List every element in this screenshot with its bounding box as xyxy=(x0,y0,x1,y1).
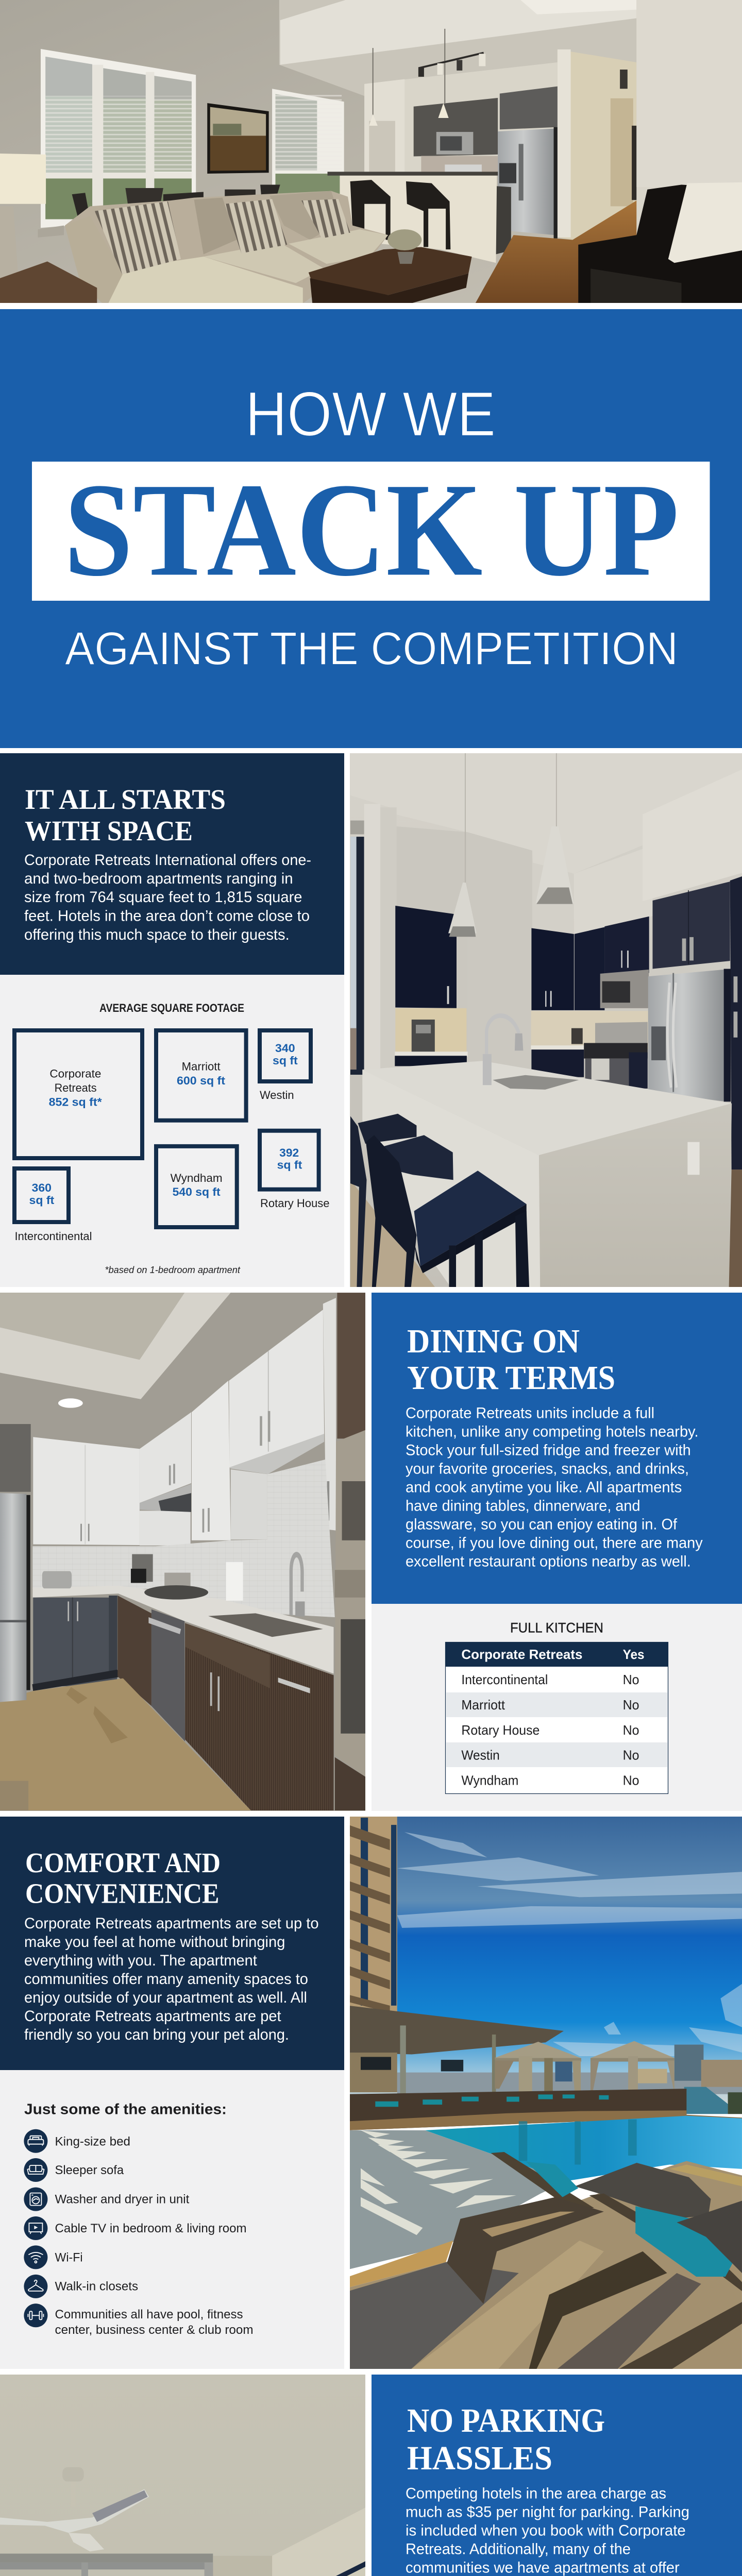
footnote: *based on 1-bedroom apartment xyxy=(105,1265,241,1275)
box: marriott: 600 sq ft xyxy=(177,1074,226,1087)
title: how we: HOW WE xyxy=(245,379,496,449)
body text: have dining tables, dinnerware, and xyxy=(406,1497,640,1515)
table rows: No xyxy=(623,1697,639,1713)
photo: living room with city view xyxy=(0,2370,369,2576)
body text: kitchen, unlike any competing hotels nearby. xyxy=(406,1423,699,1440)
body text: and cook anytime you like. All apartments xyxy=(406,1479,682,1496)
body text: Competing hotels in the area charge as xyxy=(406,2485,666,2502)
title banner xyxy=(0,309,742,748)
heading xyxy=(407,1323,615,1397)
table rows: Marriott xyxy=(461,1697,505,1713)
photo: rooftop pool xyxy=(348,1814,742,2370)
amenities list: Wi-Fi xyxy=(55,2250,82,2264)
table rows: No xyxy=(623,1722,639,1738)
heading xyxy=(25,784,226,846)
table rows: No xyxy=(623,1672,639,1687)
body text: your favorite groceries, snacks, and drinks, xyxy=(406,1460,689,1478)
box: corporate retreats: Retreats xyxy=(55,1081,97,1094)
icon: bed xyxy=(24,2129,47,2153)
box: wyndham: Wyndham xyxy=(171,1172,223,1184)
body text: enjoy outside of your apartment as well. All xyxy=(24,1989,307,2006)
table rows: No xyxy=(623,1748,639,1763)
body text: offering this much space to their guests. xyxy=(24,926,290,943)
heading xyxy=(25,1847,221,1909)
amenities list: King-size bed xyxy=(55,2134,130,2148)
table header row: Corporate Retreats xyxy=(461,1647,582,1662)
table rows: No xyxy=(623,1773,639,1788)
heading: NO PARKING xyxy=(407,2402,605,2439)
box: westin: 340 xyxy=(275,1042,295,1055)
body text: communities we have apartments at offer xyxy=(406,2560,680,2576)
body text: size from 764 square feet to 1,815 square xyxy=(24,889,302,906)
amenities list: Cable TV in bedroom & living room xyxy=(55,2222,246,2235)
body text: glassware, so you can enjoy eating in. Of xyxy=(406,1516,678,1533)
title band: stack up: STACK UP xyxy=(64,455,679,604)
table rows: Rotary House xyxy=(461,1722,539,1738)
amenities list: Washer and dryer in unit xyxy=(55,2192,190,2206)
icon: wi-fi xyxy=(24,2245,47,2269)
body text: excellent restaurant options nearby as well. xyxy=(406,1553,691,1570)
box: rotary house: 392 xyxy=(279,1146,299,1159)
box: intercontinental: 360 xyxy=(32,1181,52,1194)
body text: Retreats. Additionally, many of the xyxy=(406,2541,631,2558)
box: intercontinental: sq ft xyxy=(29,1194,55,1207)
table header row: Yes xyxy=(623,1647,645,1662)
heading: CONVENIENCE xyxy=(25,1878,220,1909)
table header row xyxy=(461,1647,645,1662)
box: marriott: Marriott xyxy=(182,1060,221,1073)
heading: IT ALL STARTS xyxy=(25,784,226,815)
icon: television xyxy=(24,2216,47,2240)
body text: Corporate Retreats apartments are set up to xyxy=(24,1915,319,1932)
box: corporate retreats: 852 sq ft* xyxy=(49,1095,102,1109)
body text xyxy=(406,1404,703,1570)
body text: course, if you love dining out, there are many xyxy=(406,1534,703,1552)
body text: Corporate Retreats units include a full xyxy=(406,1404,654,1422)
icon: hanger xyxy=(24,2275,47,2298)
panel: average square footage chart xyxy=(0,975,344,1287)
body text: make you feel at home without bringing xyxy=(24,1934,285,1951)
box: corporate retreats xyxy=(14,1030,142,1158)
box: wyndham xyxy=(156,1146,237,1227)
chart title: AVERAGE SQUARE FOOTAGE xyxy=(99,1002,244,1014)
body text: Stock your full-sized fridge and freezer with xyxy=(406,1442,691,1459)
photo: kitchen with brown cabinets xyxy=(0,1288,369,1812)
box: westin xyxy=(260,1030,311,1101)
body text: much as $35 per night for parking. Parking xyxy=(406,2504,689,2520)
photo: living room and kitchen xyxy=(0,0,742,307)
panel: full kitchen table xyxy=(372,1604,742,1811)
amenities list: Communities all have pool, fitness xyxy=(55,2308,243,2321)
table rows: Intercontinental xyxy=(461,1672,548,1687)
body text: friendly so you can bring your pet along. xyxy=(24,2026,289,2043)
heading: DINING ON xyxy=(407,1323,580,1360)
table rows: Wyndham xyxy=(461,1773,518,1788)
panel: no parking hassles xyxy=(372,2375,742,2576)
photo: white kitchen island xyxy=(349,752,742,1296)
body text xyxy=(24,1915,319,2043)
title: against the competition: AGAINST THE COMPETITION xyxy=(65,623,678,675)
panel: it all starts with space xyxy=(0,753,344,975)
box: marriott xyxy=(156,1030,246,1121)
heading: YOUR TERMS xyxy=(407,1359,615,1397)
panel: dining on your terms xyxy=(372,1293,742,1604)
panel: amenities xyxy=(0,2070,344,2369)
body text: communities offer many amenity spaces to xyxy=(24,1971,308,1988)
body text: Corporate Retreats International offers one- xyxy=(24,852,311,869)
box: rotary house: sq ft xyxy=(277,1158,302,1171)
icon: dumbbell xyxy=(24,2303,47,2327)
body text: is included when you book with Corporate xyxy=(406,2522,686,2539)
heading: COMFORT AND xyxy=(25,1847,221,1878)
table xyxy=(445,1642,668,1794)
amenities list: center, business center & club room xyxy=(55,2323,254,2337)
box: westin: sq ft xyxy=(273,1054,298,1067)
table rows xyxy=(461,1672,639,1788)
heading: HASSLES xyxy=(407,2439,552,2477)
box: rotary house xyxy=(260,1131,330,1210)
box: westin: Westin xyxy=(260,1089,294,1101)
panel: comfort and convenience xyxy=(0,1817,344,2070)
heading xyxy=(407,2402,605,2477)
table title: FULL KITCHEN xyxy=(510,1620,603,1635)
icon: sofa xyxy=(24,2158,47,2182)
amenities list: Walk-in closets xyxy=(55,2280,138,2294)
amenities heading: Just some of the amenities: xyxy=(24,2102,227,2118)
body text xyxy=(24,852,311,943)
box: intercontinental xyxy=(14,1168,92,1243)
body text: feet. Hotels in the area don’t come close to xyxy=(24,908,310,924)
box: rotary house: Rotary House xyxy=(260,1197,330,1210)
box: intercontinental: Intercontinental xyxy=(14,1230,92,1243)
body text: Corporate Retreats apartments are pet xyxy=(24,2008,281,2025)
body text xyxy=(406,2485,696,2576)
heading: WITH SPACE xyxy=(25,815,193,846)
amenities list xyxy=(55,2134,254,2337)
body text: and two-bedroom apartments ranging in xyxy=(24,870,293,887)
body text: everything with you. The apartment xyxy=(24,1952,257,1969)
table rows: Westin xyxy=(461,1748,500,1763)
amenities list: Sleeper sofa xyxy=(55,2163,124,2177)
box: corporate retreats: Corporate xyxy=(49,1067,101,1080)
box: wyndham: 540 sq ft xyxy=(173,1185,221,1198)
icon: washer xyxy=(24,2188,47,2211)
